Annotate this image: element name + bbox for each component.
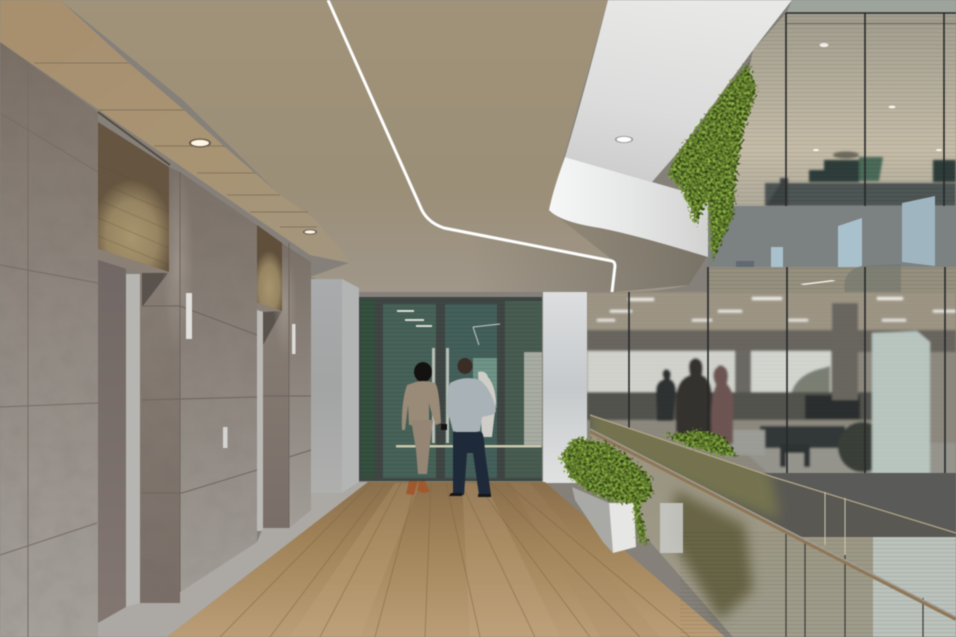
door glass panes xyxy=(361,300,542,478)
second sconce xyxy=(292,324,296,354)
slab reflections xyxy=(736,196,935,292)
glass entrance door xyxy=(359,297,542,481)
glass panel above handrail xyxy=(590,415,956,537)
office windows xyxy=(587,351,831,401)
glass mullions xyxy=(629,13,956,475)
recessed downlights xyxy=(189,138,317,235)
right white column xyxy=(543,292,587,483)
wall sconce xyxy=(186,293,192,339)
view below handrail xyxy=(590,431,956,637)
upper office level xyxy=(708,0,956,292)
second wood header xyxy=(256,225,282,312)
first wood header xyxy=(98,122,170,272)
child held by man xyxy=(478,372,496,437)
upper ceiling spots xyxy=(813,43,942,151)
glass balustrade with handrail xyxy=(590,405,956,637)
light strip beside corridor xyxy=(98,482,368,637)
middle stone wall xyxy=(140,167,257,603)
upper glass wall xyxy=(730,13,956,207)
ceiling lights xyxy=(597,281,956,322)
people in foreground xyxy=(402,358,496,497)
office ceiling xyxy=(587,292,956,330)
white curved band xyxy=(549,157,708,257)
spot light in white ceiling xyxy=(615,136,633,143)
people in office xyxy=(656,358,733,444)
hanging plant xyxy=(667,62,757,262)
slab between floors xyxy=(708,206,956,270)
wooden floor xyxy=(167,482,725,637)
woman xyxy=(402,362,447,495)
handrail xyxy=(590,431,956,619)
right stone wall xyxy=(263,243,311,528)
white curved ceiling underside xyxy=(565,0,792,182)
office back band xyxy=(587,330,956,352)
darker ceiling tip right of LED strip xyxy=(459,210,707,292)
first elevator recess xyxy=(98,249,140,623)
left stone wall xyxy=(0,42,98,637)
lower slab band xyxy=(708,267,956,292)
slab floor in front of office xyxy=(735,473,956,534)
office floor xyxy=(735,443,956,475)
plant behind balustrade xyxy=(663,430,737,457)
planter plant xyxy=(560,437,653,547)
lower office seen through glass xyxy=(587,281,956,482)
bright glazed box xyxy=(872,331,930,474)
office desks xyxy=(587,392,927,472)
tan soffit with panels xyxy=(0,0,349,263)
light switch xyxy=(223,427,228,448)
ceiling shadow line along wall top xyxy=(98,112,170,165)
office column xyxy=(832,303,858,400)
man xyxy=(447,358,496,497)
corridor end white column xyxy=(311,279,359,493)
white planter xyxy=(572,487,683,553)
LED strip in ceiling xyxy=(328,0,615,292)
door lights xyxy=(396,310,541,448)
door handles xyxy=(432,348,449,443)
elevator door jamb xyxy=(126,274,140,607)
main tan ceiling xyxy=(60,0,707,292)
upper office furniture xyxy=(765,152,956,206)
second elevator xyxy=(257,303,263,531)
glass top rail xyxy=(590,415,956,533)
